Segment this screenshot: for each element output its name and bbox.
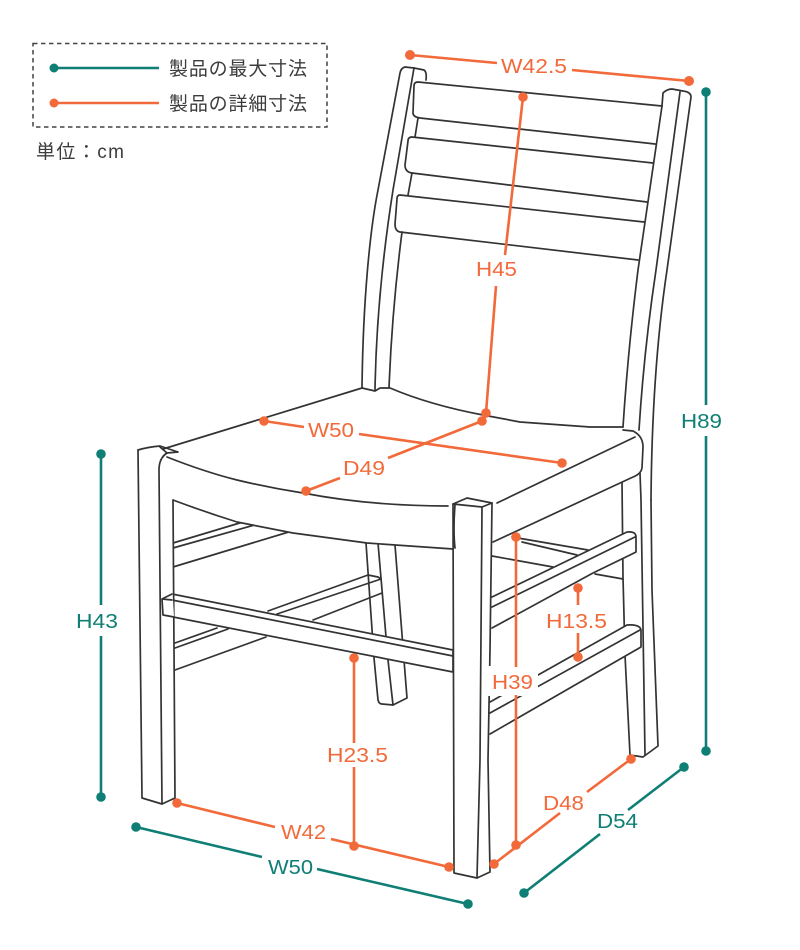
rear stretcher [492,537,623,579]
dimension: W42 inner width: W42 [281,822,326,844]
legend: maximum dimensions: 製品の最大寸法 [169,58,307,80]
dimension: H13.5 stretcher spacing: H13.5 [546,611,607,633]
dimension: W50 overall width [131,822,473,909]
front right leg [453,498,492,878]
seat [159,388,643,549]
legend box [33,44,327,127]
dimension: D54 overall depth [519,762,689,898]
dimension: H89 overall height: H89 [681,411,722,433]
dimension: H39 under-seat height: H39 [492,672,533,694]
backrest posts [362,67,691,500]
dimension: H13.5 stretcher spacing [543,583,610,662]
dimension: W42.5 top width [405,50,694,86]
legend: detail dimensions [50,93,307,115]
backrest slats [395,82,662,260]
dimension: W50 seat width [259,416,567,468]
unit note: 単位：cm [36,141,124,163]
dimension: D54 overall depth: D54 [597,811,638,833]
front rail left end over leg [162,594,174,617]
dimension: D49 seat depth: D49 [343,458,385,480]
front stretcher [162,594,453,672]
dimension: D48 inner depth: D48 [543,793,584,815]
legend: detail dimensions: 製品の詳細寸法 [169,93,307,115]
chair line drawing [138,67,691,878]
dimension: H23.5 stretcher height [327,653,388,846]
dimension: H43 seat height [76,449,118,802]
legend [33,44,327,127]
dimension: H43 seat height: H43 [76,611,118,633]
dimension: H45 backrest height: H45 [476,259,517,281]
dimension: W42 inner width [172,798,454,872]
dimension: W50 seat width: W50 [308,420,354,442]
dimension: W42.5 top width: W42.5 [501,56,567,78]
dimension: H45 backrest height [476,92,528,418]
front left leg [138,446,178,804]
left side stretchers [173,522,382,670]
dimension: H39 under-seat height [487,532,538,845]
dimension: H89 overall height [681,87,722,756]
back left leg [366,543,407,705]
dimension: D49 seat depth [301,416,487,496]
legend: maximum dimensions [50,58,307,80]
dimension: W50 overall width: W50 [268,857,313,879]
dimension: D48 inner depth [489,754,636,869]
right side stretchers [490,532,641,734]
dimension: H23.5 stretcher height: H23.5 [327,745,388,767]
back right leg [622,473,658,757]
